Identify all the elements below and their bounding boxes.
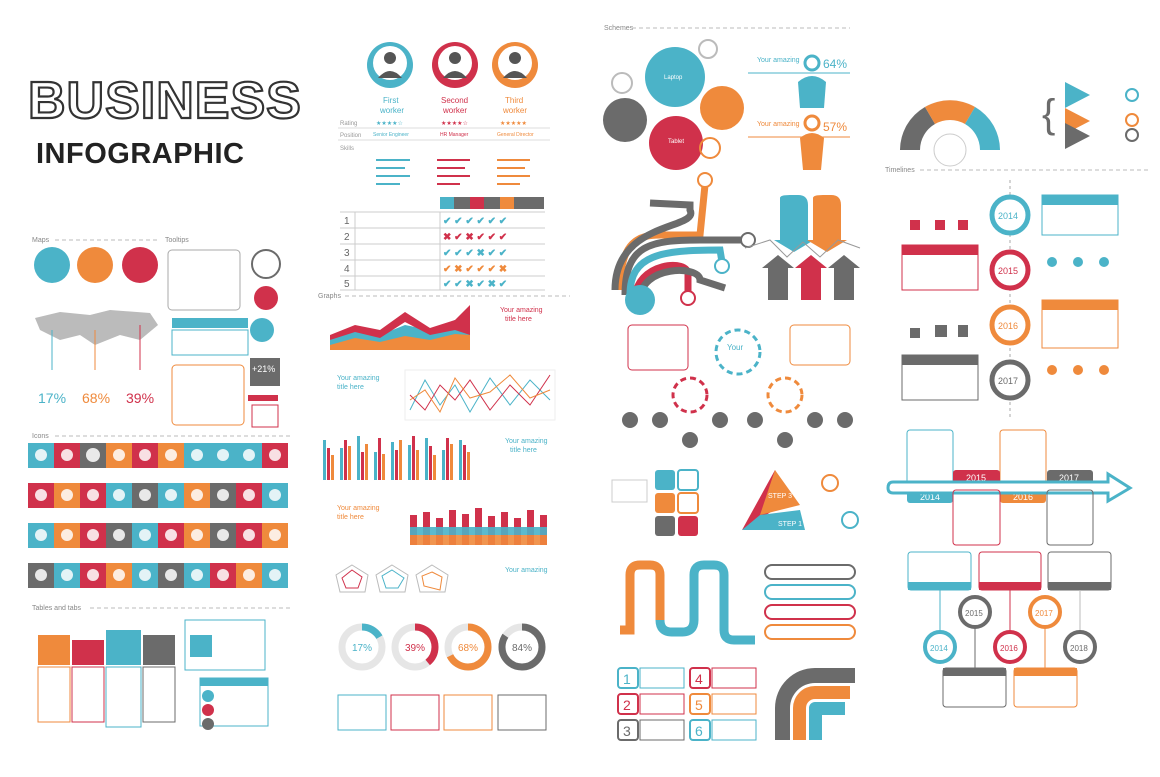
numbered boxes: 5 [695, 697, 703, 713]
graphs: area chart [318, 293, 570, 350]
semicircle chart [900, 82, 1138, 166]
check table: 2 [344, 232, 350, 243]
donut charts: 68% [458, 643, 478, 654]
donut charts: 17% [352, 643, 372, 654]
check table: 4 [344, 264, 350, 275]
section: tables and tabs: Tables and tabs [32, 605, 82, 612]
section: icons grid: Icons [32, 433, 49, 440]
graphs: bar chart: title here [510, 447, 537, 454]
graphs: line chart: Your amazing [337, 375, 380, 382]
timeline vertical: 2015 [998, 266, 1018, 276]
check table: ✔ ✔ ✔ ✖ ✔ ✔ [443, 248, 507, 259]
numbered boxes: 6 [695, 723, 703, 739]
graphs: radar charts [336, 565, 548, 592]
schemes circles: Schemes [604, 25, 634, 32]
workers: Third [505, 96, 523, 105]
semicircle chart: { [1042, 92, 1055, 136]
workers: worker [379, 106, 404, 115]
workers: First [383, 96, 399, 105]
graphs: line chart: title here [337, 384, 364, 391]
dashed circles: Your [727, 343, 744, 352]
workers: ★★★★☆ [376, 120, 403, 127]
schemes circles: Tablet [668, 139, 684, 145]
timeline circles bottom: 2015 [965, 609, 983, 618]
graphs: stacked bars: title here [337, 514, 364, 521]
graphs: radar charts: Your amazing [505, 567, 548, 574]
workers: Skills [340, 146, 354, 152]
donut charts: 39% [405, 643, 425, 654]
timeline arrow [888, 430, 1130, 545]
workers: Rating [340, 121, 357, 127]
check table: 1 [344, 216, 350, 227]
timeline circles bottom: 2017 [1035, 609, 1053, 618]
squares and triangle [612, 470, 858, 536]
workers: Position [340, 133, 361, 139]
schemes circles: Laptop [664, 75, 683, 81]
workers: General Director [497, 132, 534, 138]
timeline arrow: 2016 [1013, 492, 1033, 502]
section: icons grid [28, 433, 290, 588]
schemes circles: Your amazing [757, 57, 800, 64]
timeline arrow: 2017 [1059, 473, 1079, 483]
timeline vertical: 2016 [998, 321, 1018, 331]
section: tooltips: Tooltips [165, 237, 189, 244]
timeline arrow: 2014 [920, 492, 940, 502]
title [28, 72, 302, 170]
schemes circles [603, 25, 850, 170]
squares and triangle: STEP 1 [778, 521, 802, 528]
numbered boxes: 3 [623, 723, 631, 739]
graphs: stacked bars: Your amazing [337, 505, 380, 512]
check table: 3 [344, 248, 350, 259]
section: tooltips: +21% [252, 364, 275, 374]
workers: HR Manager [440, 132, 469, 138]
graphs: line chart [337, 370, 555, 420]
timeline arrow: 2015 [966, 473, 986, 483]
section: maps [32, 237, 160, 406]
donut charts [338, 627, 546, 730]
numbered boxes: 2 [623, 697, 631, 713]
title: INFOGRAPHIC [36, 138, 244, 170]
workers: worker [502, 106, 527, 115]
wavy path [620, 565, 855, 640]
arrow boxes [745, 195, 860, 300]
timeline vertical: 2014 [998, 211, 1018, 221]
check table: ✔ ✔ ✔ ✔ ✔ ✔ [443, 216, 507, 227]
numbered boxes [618, 668, 855, 740]
section: tables and tabs [32, 605, 290, 730]
check table: ✔ ✔ ✖ ✔ ✖ ✔ [443, 279, 507, 290]
check table: ✔ ✖ ✔ ✔ ✔ ✖ [443, 264, 507, 275]
timeline circles bottom [908, 552, 1111, 707]
schemes circles: 57% [823, 120, 847, 134]
schemes circles: Your amazing [757, 121, 800, 128]
squares and triangle: STEP 3 [768, 493, 792, 500]
workers: Second [441, 96, 468, 105]
timeline circles bottom: 2016 [1000, 644, 1018, 653]
workers: Senior Engineer [373, 132, 409, 138]
timeline circles bottom: 2014 [930, 644, 948, 653]
flow lines [615, 173, 755, 315]
timeline circles bottom: 2018 [1070, 644, 1088, 653]
section: maps: 17% [38, 390, 66, 406]
check table: ✖ ✔ ✖ ✔ ✔ ✔ [443, 232, 507, 243]
workers: ★★★★★ [500, 120, 527, 127]
graphs: area chart: title here [505, 316, 532, 323]
timeline vertical: 2017 [998, 376, 1018, 386]
section: maps: 39% [126, 390, 154, 406]
graphs: area chart: Your amazing [500, 307, 543, 314]
graphs: area chart: Graphs [318, 293, 341, 300]
graphs: bar chart [323, 436, 548, 480]
section: maps: 68% [82, 390, 110, 406]
section: tooltips [165, 237, 280, 427]
numbered boxes: 4 [695, 671, 703, 687]
title: BUSINESS [28, 72, 302, 130]
section: maps: Maps [32, 237, 50, 244]
numbered boxes: 1 [623, 671, 631, 687]
check table [340, 197, 545, 290]
workers: worker [442, 106, 467, 115]
graphs: bar chart: Your amazing [505, 438, 548, 445]
workers [338, 42, 550, 184]
check table: 5 [344, 279, 350, 290]
donut charts: 84% [512, 643, 532, 654]
graphs: stacked bars [337, 505, 547, 545]
timeline vertical: Timelines [885, 167, 915, 174]
workers: ★★★★☆ [441, 120, 468, 127]
timeline vertical [885, 167, 1150, 420]
dashed circles [622, 325, 853, 448]
schemes circles: 64% [823, 57, 847, 71]
